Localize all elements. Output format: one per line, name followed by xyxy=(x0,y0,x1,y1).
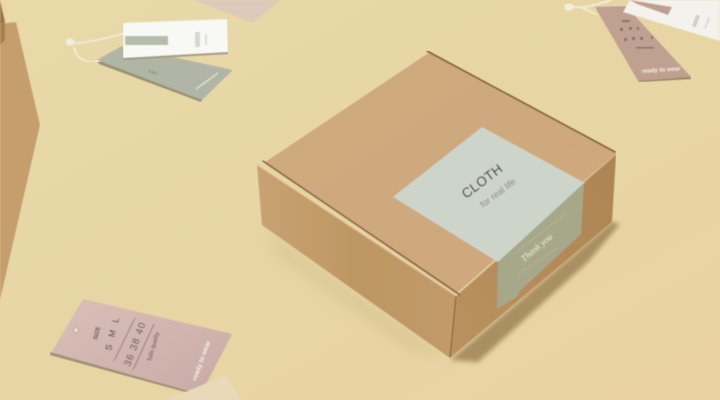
tag: pink, bottom left: S M L xyxy=(103,317,121,351)
tag: mauve, top right xyxy=(595,6,691,82)
box front-right side xyxy=(450,155,616,358)
left cardboard box edge xyxy=(0,0,40,300)
tag: pink, bottom left xyxy=(50,299,232,396)
flap creases xyxy=(257,51,616,357)
tag: mauve, top right: ready to wear xyxy=(642,66,681,75)
tag: pink, bottom left: 36 38 40 xyxy=(122,320,149,368)
tag: pink, bottom left: ready to wear xyxy=(191,339,212,382)
sticker brand text: CLOTH xyxy=(459,161,506,201)
tag: pink, bottom left: SIZE xyxy=(93,326,102,340)
box shadow xyxy=(262,222,620,362)
tag: white, top left xyxy=(123,19,228,60)
kraft box xyxy=(257,51,616,358)
label: square sticker xyxy=(393,127,585,262)
tag: sage green, top left: S M L xyxy=(148,68,160,77)
tag: pink top edge xyxy=(193,0,280,23)
label: side sticker with thank you xyxy=(497,183,584,309)
label: side sticker with thank you: Thank you xyxy=(519,231,555,264)
sticker tagline: for real life xyxy=(478,176,518,210)
tag: cream corner, bottom xyxy=(166,375,241,400)
string loop xyxy=(66,33,126,62)
box top xyxy=(264,52,616,294)
tag: pink, bottom left: fulls quality xyxy=(147,331,161,362)
tag: sage green, top left xyxy=(97,46,233,102)
string top right xyxy=(564,0,612,15)
box front-left side xyxy=(257,165,456,358)
tag: white, top right xyxy=(623,0,720,41)
